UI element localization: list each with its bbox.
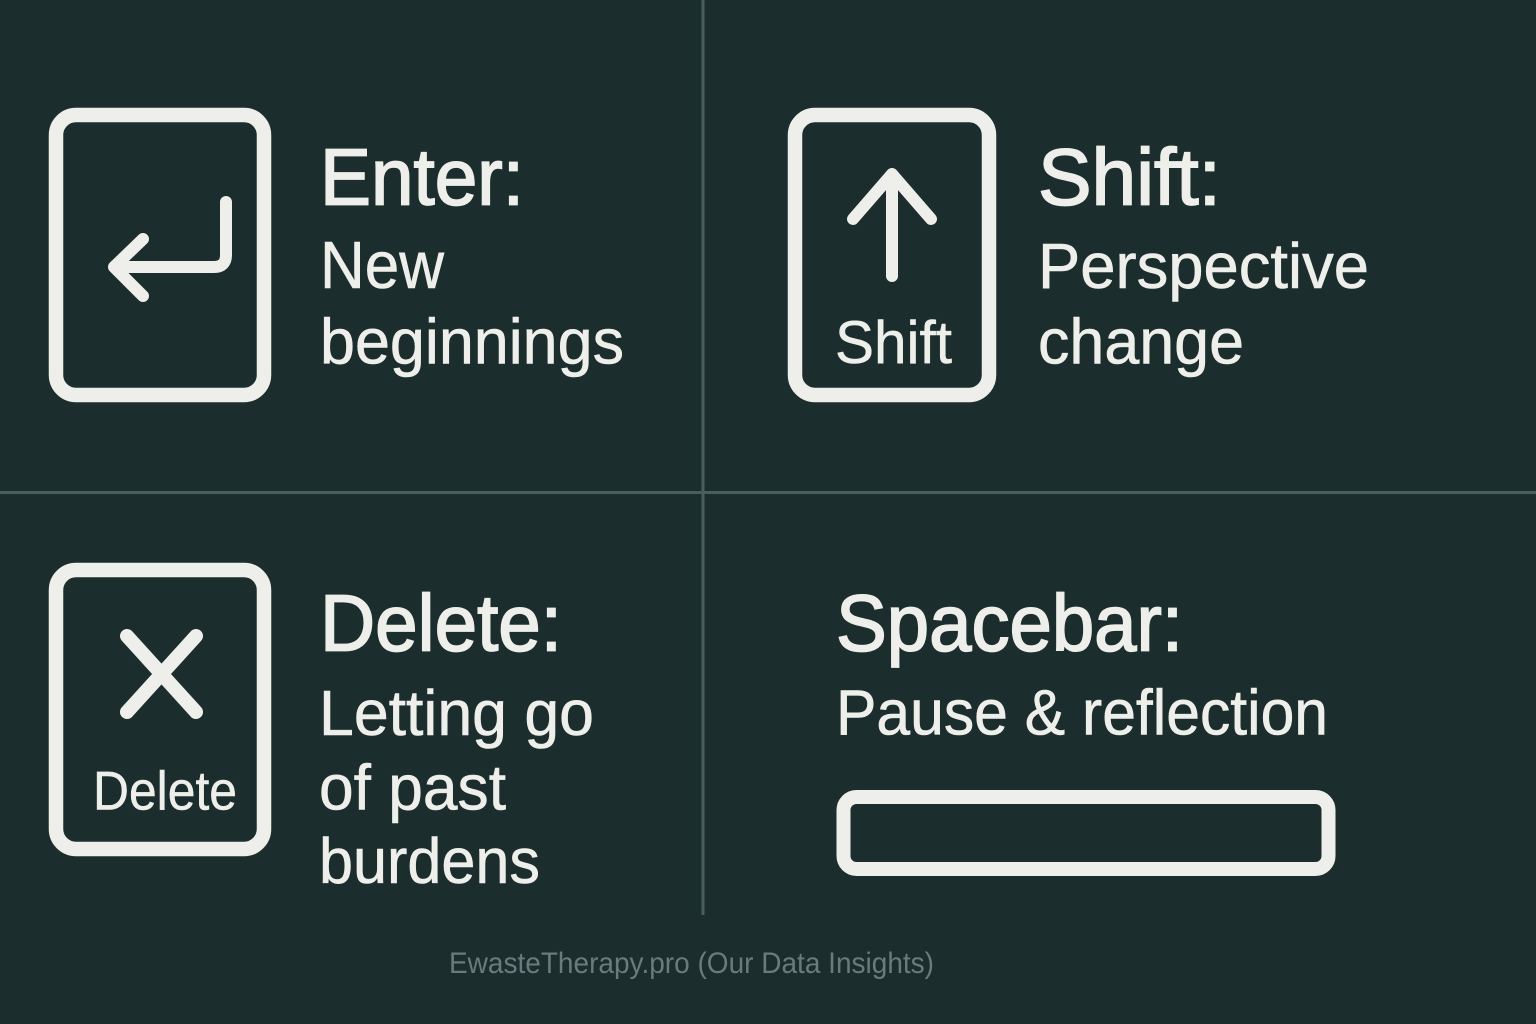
text: pause and reflection: Pause & reflection — [836, 676, 1328, 748]
panel: shift — [795, 115, 1369, 395]
panel: spacebar — [836, 578, 1328, 869]
text: new beginnings: New — [320, 228, 445, 303]
text: perspective change: change — [1038, 306, 1244, 378]
heading: enter: Enter: — [320, 132, 524, 222]
panel: enter — [56, 115, 624, 395]
icon: enter key — [56, 115, 264, 395]
heading: shift: Shift: — [1038, 132, 1221, 222]
icon: spacebar key — [844, 797, 1328, 869]
text: perspective change: Perspective — [1038, 230, 1369, 302]
text: letting go of past burdens: Letting go — [319, 677, 594, 749]
panel: delete — [56, 570, 594, 897]
icon: delete key: Delete — [93, 760, 237, 822]
text: letting go of past burdens: burdens — [319, 825, 540, 897]
heading: spacebar: Spacebar: — [836, 578, 1183, 668]
icon: shift key: Shift — [835, 309, 952, 376]
icon: shift key — [795, 115, 989, 395]
footer credit: EwasteTherapy.pro (Our Data Insights) — [449, 947, 934, 980]
icon: delete key — [56, 570, 264, 849]
heading: delete: Delete: — [320, 578, 562, 668]
text: letting go of past burdens: of past — [319, 752, 506, 824]
text: new beginnings: beginnings — [320, 306, 624, 378]
